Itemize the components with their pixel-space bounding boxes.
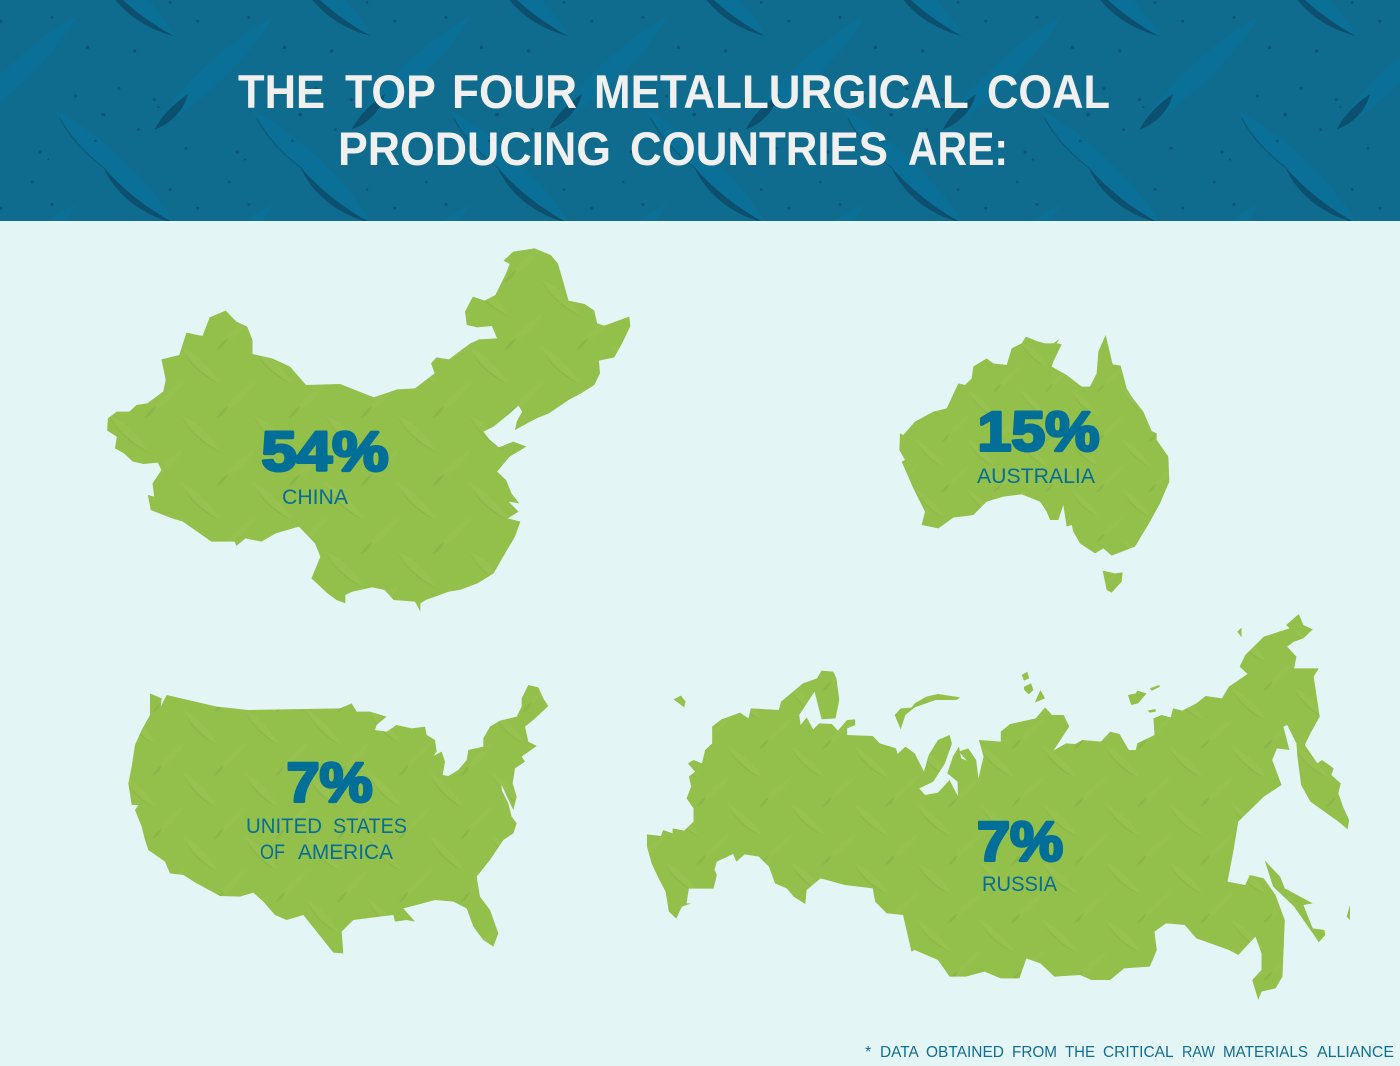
panel: china bbox=[107, 248, 630, 612]
map: russia bbox=[647, 614, 1350, 1000]
label: united states of america: OF bbox=[260, 841, 285, 864]
title: COAL bbox=[987, 65, 1110, 118]
title: TOP bbox=[345, 65, 435, 118]
footnote: OBTAINED bbox=[926, 1044, 1004, 1061]
footnote: RAW bbox=[1182, 1044, 1216, 1061]
label: australia: AUSTRALIA bbox=[977, 465, 1095, 488]
label: russia: RUSSIA bbox=[982, 873, 1057, 896]
label: china: CHINA bbox=[282, 486, 348, 509]
title: COUNTRIES bbox=[630, 122, 888, 175]
title: PRODUCING bbox=[338, 122, 611, 175]
panel: russia bbox=[647, 614, 1350, 1000]
footnote: DATA bbox=[880, 1044, 919, 1061]
panel: united states bbox=[128, 685, 548, 953]
map: china bbox=[107, 248, 630, 612]
label: united states of america: AMERICA bbox=[298, 841, 393, 864]
footnote: ALLIANCE bbox=[1317, 1044, 1394, 1061]
label: united states of america: STATES bbox=[333, 815, 407, 838]
title bbox=[238, 65, 1110, 175]
title: FOUR bbox=[452, 65, 577, 118]
title: ARE: bbox=[908, 122, 1008, 175]
footnote: MATERIALS bbox=[1223, 1044, 1308, 1061]
footnote: THE bbox=[1065, 1044, 1095, 1061]
map: australia bbox=[899, 335, 1169, 593]
label: united states of america bbox=[246, 815, 407, 864]
footnote: * bbox=[865, 1044, 871, 1061]
value: 7%: 7% bbox=[286, 750, 372, 814]
value: 15%: 15% bbox=[978, 400, 1100, 462]
label: united states of america: UNITED bbox=[246, 815, 322, 838]
header band: diamond plate texture bbox=[0, 0, 1400, 221]
panel: australia bbox=[899, 335, 1169, 593]
title: METALLURGICAL bbox=[594, 65, 968, 118]
title: THE bbox=[238, 65, 325, 118]
value: 7%: 7% bbox=[977, 810, 1063, 872]
map: united states bbox=[128, 685, 548, 953]
footnote: FROM bbox=[1012, 1044, 1057, 1061]
footnote: CRITICAL bbox=[1103, 1044, 1174, 1061]
value: 54%: 54% bbox=[262, 420, 388, 482]
